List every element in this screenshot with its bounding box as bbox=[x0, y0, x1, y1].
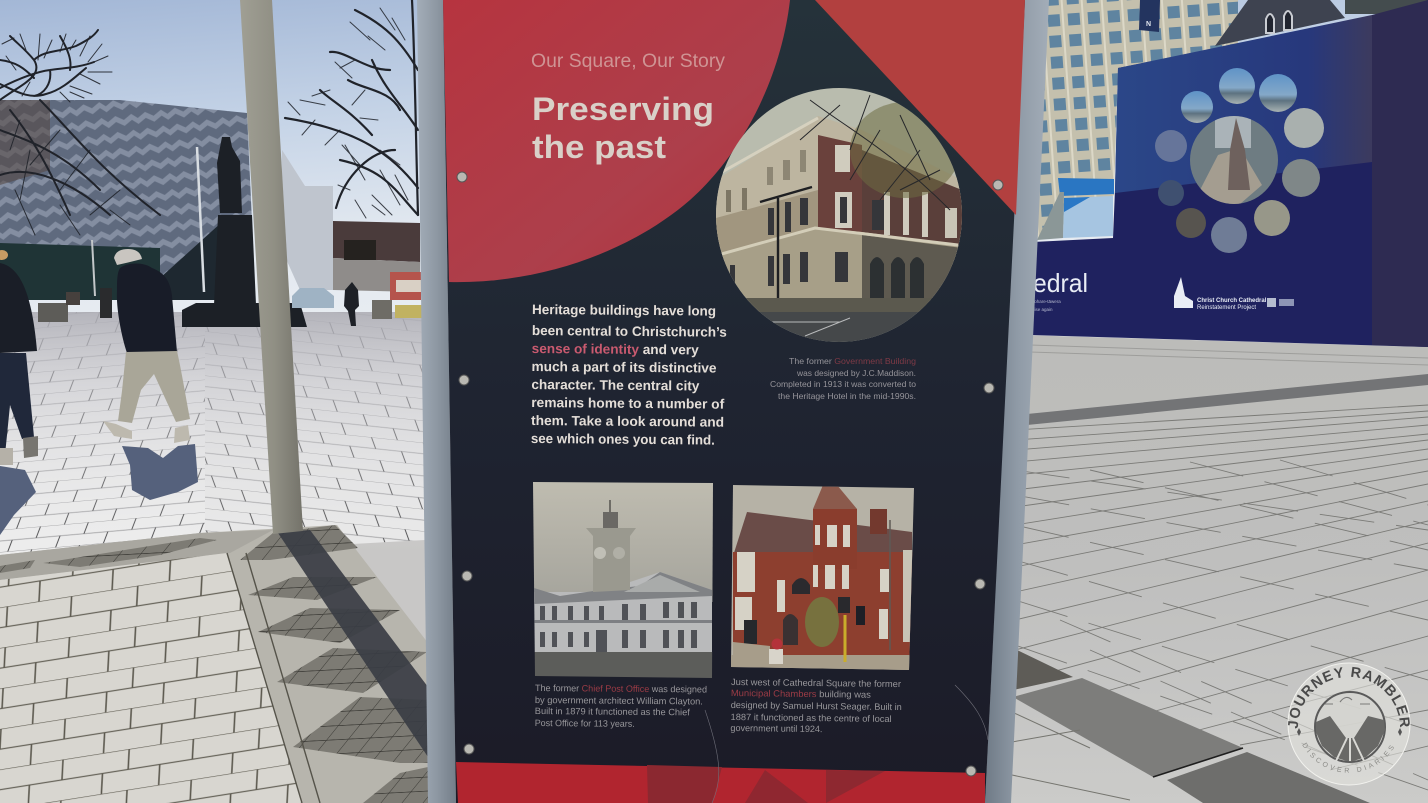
caption: Municipal Chambers: 1887 it functioned as the centre of local bbox=[731, 712, 892, 724]
dark ground patch and kerb bbox=[1012, 648, 1370, 803]
background: hotel tower: N bbox=[1146, 21, 1151, 28]
red band at bottom bbox=[456, 762, 985, 803]
paving joints, right plaza bbox=[1015, 405, 1428, 790]
red triangular shape top right bbox=[815, 0, 1025, 215]
caption: Government Building: the Heritage Hotel in the mid-1990s. bbox=[778, 391, 916, 401]
red curved shape top left bbox=[443, 0, 790, 282]
caption: Chief Post Office: Post Office for 113 years. bbox=[535, 718, 635, 729]
left sign post bbox=[417, 0, 456, 803]
hoarding lettering: Reinstatement Project bbox=[1197, 305, 1256, 311]
title: Preserving bbox=[532, 91, 714, 127]
body text: see which ones you can find. bbox=[531, 431, 715, 448]
body text: Heritage buildings have long bbox=[532, 302, 716, 319]
caption: Government Building: Completed in 1913 it was converted to bbox=[770, 379, 916, 389]
body text: them. Take a look around and bbox=[531, 413, 724, 430]
photo circles on hoarding bbox=[1155, 68, 1324, 253]
hoarding lettering: rise again bbox=[1033, 307, 1053, 312]
background: hotel tower bbox=[1036, 0, 1428, 240]
caption: Municipal Chambers: Just west of Cathedral Square the former bbox=[731, 677, 901, 689]
background: statue on plinth bbox=[182, 137, 307, 327]
hoarding lettering: Christ Church Cathedral bbox=[1197, 298, 1267, 304]
body text: much a part of its distinctive bbox=[531, 359, 717, 376]
hoarding lettering bbox=[1033, 268, 1294, 312]
circular photo: former Government Building bbox=[716, 88, 962, 344]
caption: Chief Post Office bbox=[535, 683, 707, 729]
hoarding lettering: tohare-tāwera bbox=[1033, 299, 1061, 304]
caption: Municipal Chambers bbox=[730, 677, 902, 735]
subtitle: Our Square, Our Story bbox=[531, 50, 725, 72]
body text: character. The central city bbox=[531, 377, 700, 393]
background: art gallery building bbox=[0, 100, 420, 300]
body text: been central to Christchurch’s bbox=[532, 323, 727, 340]
caption: Chief Post Office: Built in 1879 it functioned as the Chief bbox=[535, 706, 690, 717]
caption: Municipal Chambers: Municipal Chambers building was bbox=[731, 688, 871, 700]
foreground paving with tree grates bbox=[0, 525, 428, 803]
caption: Government Building: The former Government Building bbox=[789, 356, 916, 366]
caption: Government Building: was designed by J.C.Maddison. bbox=[796, 368, 916, 378]
hoarding lettering: edral bbox=[1033, 268, 1088, 298]
caption: Municipal Chambers: government until 1924. bbox=[730, 723, 823, 734]
watermark: Journey Rambler bbox=[1288, 662, 1410, 786]
title: the past bbox=[532, 129, 666, 165]
metal pole bbox=[240, 0, 303, 534]
photo: Municipal Chambers bbox=[731, 485, 915, 671]
watermark badge illustration bbox=[1315, 692, 1385, 762]
blue booth with sky image bbox=[1037, 178, 1114, 240]
sign panel bbox=[417, 0, 1049, 803]
mounting screws bbox=[457, 172, 1003, 776]
dark panel background bbox=[443, 0, 1025, 803]
caption: Chief Post Office: The former Chief Post Office was designed bbox=[535, 683, 707, 695]
photo: Chief Post Office bbox=[533, 482, 714, 678]
sky bbox=[0, 0, 1428, 345]
person walking bbox=[103, 249, 198, 500]
watermark: Journey Rambler: DISCOVER DIARIES bbox=[1302, 742, 1394, 773]
right sign post bbox=[985, 0, 1049, 803]
body text: remains home to a number of bbox=[531, 395, 725, 412]
person at left edge bbox=[0, 250, 38, 535]
hoarding: Christ Church Cathedral Reinstatement Project bbox=[1030, 0, 1428, 347]
watermark: Journey Rambler: JOURNEY RAMBLER bbox=[1288, 666, 1410, 728]
title bbox=[532, 91, 714, 165]
caption: Municipal Chambers: designed by Samuel Hurst Seager. Built in bbox=[731, 700, 902, 712]
body text bbox=[531, 302, 727, 448]
scratches on sign bbox=[705, 685, 988, 803]
background: plaza ground bbox=[0, 312, 1428, 803]
caption: Government Building bbox=[770, 356, 916, 401]
body text: sense of identity and very bbox=[532, 341, 699, 357]
background: bare trees bbox=[0, 0, 418, 235]
caption: Chief Post Office: by government architect William Clayton. bbox=[535, 695, 703, 706]
background: distant cars and people bbox=[38, 272, 422, 326]
